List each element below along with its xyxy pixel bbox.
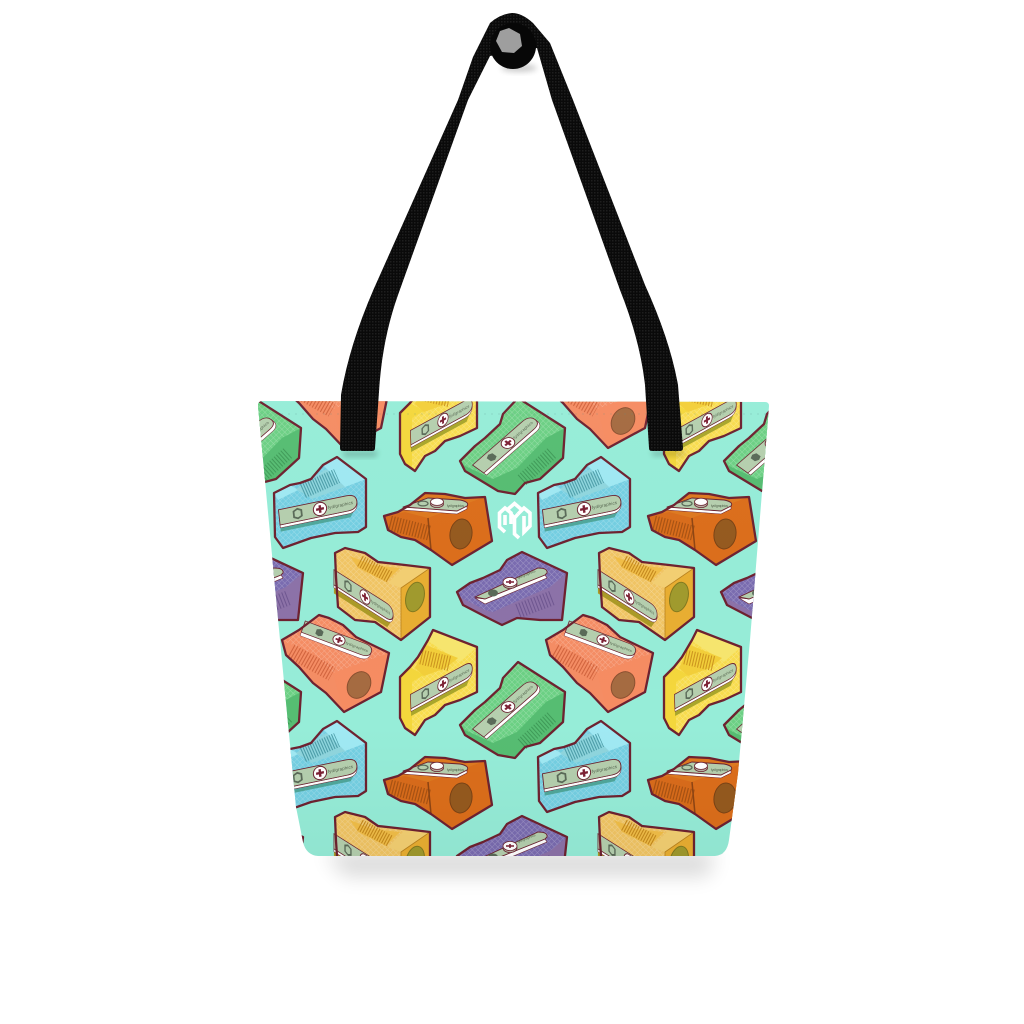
icon: white brand logo: [500, 504, 530, 538]
blade and screw: fyd/graphics: [609, 641, 632, 653]
blade and screw: fyd/graphics: [517, 569, 536, 580]
peg shadow: [501, 64, 537, 72]
pattern repeats: green sharpeners: [196, 398, 829, 758]
left and right black straps with wall peg: [340, 13, 685, 457]
hole: [403, 580, 427, 614]
peg head: grey hexagon: [496, 28, 522, 53]
blade and screw: fyd/graphics: [447, 504, 464, 508]
pattern repeats: blue sharpeners: [274, 457, 630, 812]
peg: [490, 23, 536, 69]
hole: [448, 518, 474, 550]
sharpener: orange: [384, 493, 492, 565]
pattern repeats: gold sharpeners: [334, 548, 694, 904]
pattern repeats: orange sharpeners: [384, 493, 756, 829]
pattern repeats: purple sharpeners: [193, 552, 831, 889]
tote bag body with sharpener pattern: [258, 401, 769, 856]
strap shadow on bag: [342, 451, 685, 457]
sharpener: coral: [546, 615, 653, 712]
sharpener: purple: [457, 552, 567, 625]
pattern repeats: coral sharpeners: [282, 351, 653, 712]
strap: looped black handle: [340, 13, 683, 451]
hole: [606, 667, 640, 703]
bag ground shadow: [325, 852, 715, 876]
blade and screw: fyd/graphics: [449, 667, 469, 683]
blade and screw: fyd/graphics: [328, 500, 354, 510]
sharpener: yellow: [400, 630, 477, 735]
blade and screw: fyd/graphics: [512, 685, 534, 703]
sharpener: green: [460, 662, 565, 758]
sharpener: blue: [274, 457, 366, 548]
pattern repeats: yellow sharpeners: [400, 366, 741, 735]
sharpener: gold: [334, 548, 430, 640]
blade and screw: fyd/graphics: [371, 598, 390, 616]
